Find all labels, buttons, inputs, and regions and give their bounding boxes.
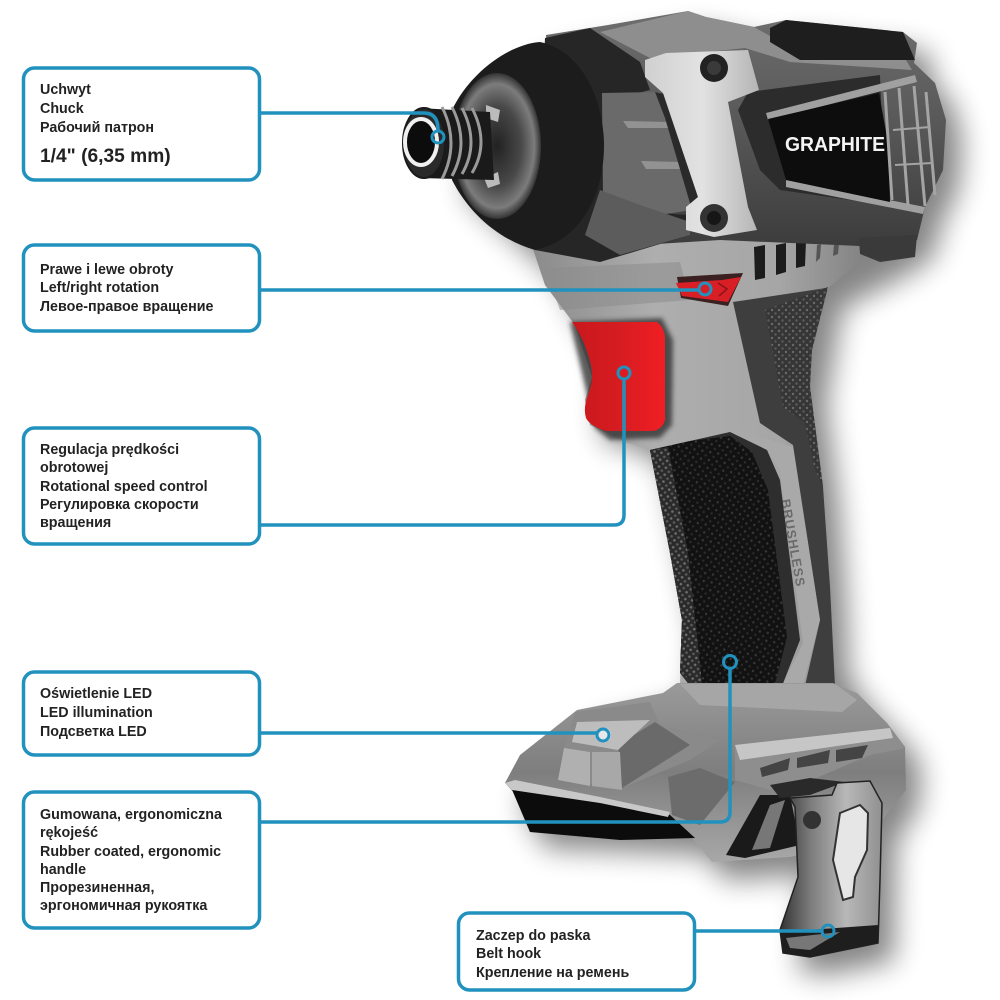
rear grille — [885, 86, 935, 206]
callout: speed control: Regulacja prędkości — [40, 442, 179, 458]
callout: speed control: вращения — [40, 515, 111, 531]
callout: belt hook — [458, 913, 694, 990]
rear grip dotted rubber — [765, 287, 828, 487]
callout: belt hook: Zaczep do paska — [476, 928, 591, 944]
grip left lighter strip — [650, 447, 702, 684]
callout: LED: LED illumination — [40, 705, 153, 721]
callout: speed control: Rotational speed control — [40, 479, 208, 495]
handle body — [530, 240, 885, 685]
light stripes around label — [766, 75, 925, 214]
callout: LED: Подсветка LED — [40, 724, 147, 740]
base top block — [560, 702, 720, 788]
top gray cover — [600, 11, 912, 70]
motor housing — [546, 11, 946, 256]
leader: rotation switch — [259, 283, 711, 295]
spindle highlights — [484, 105, 500, 188]
collar slots — [623, 121, 683, 169]
logo: GRAPHITE — [785, 134, 885, 156]
LED lens — [597, 728, 611, 742]
nose inner ring — [453, 73, 541, 219]
callout: rotation: Prawe i lewe obroty — [40, 262, 174, 278]
battery base — [505, 683, 906, 862]
leader: grip — [259, 656, 736, 822]
callout: rotation: Left/right rotation — [40, 280, 159, 296]
trigger recess — [570, 318, 673, 440]
callout: grip: handle — [40, 862, 86, 878]
callout: grip — [24, 792, 260, 928]
grip inner dark lining — [650, 432, 800, 686]
callout: rotation — [24, 245, 260, 331]
callout: chuck: 1/4" (6,35 mm) — [40, 146, 171, 167]
callout: grip: Прорезиненная, — [40, 880, 154, 896]
leader: belt hook — [695, 925, 834, 937]
black logo panel — [768, 93, 890, 202]
black nose rear — [535, 28, 690, 262]
red trigger — [572, 322, 665, 431]
callout: speed control: obrotowej — [40, 460, 108, 476]
drill tool illustration — [403, 11, 946, 957]
handle highlight band — [545, 262, 690, 310]
callout: belt hook: Belt hook — [476, 946, 541, 962]
callout: speed control: Регулировка скорости — [40, 497, 199, 513]
callout: chuck: Uchwyt — [40, 82, 91, 98]
callout: LED — [24, 672, 260, 755]
callout: speed control — [24, 428, 260, 544]
silver band — [645, 50, 759, 237]
black dotted grip — [650, 436, 787, 684]
silver side strip with lettering — [730, 428, 820, 686]
battery slot — [510, 785, 695, 840]
callout: grip: эргономичная рукоятка — [40, 898, 208, 914]
callout: chuck — [24, 68, 260, 180]
black nose cone — [452, 42, 604, 250]
direction switch — [676, 273, 743, 306]
belt hook — [780, 781, 882, 957]
callout: grip: Rubber coated, ergonomic — [40, 844, 221, 860]
callout: grip: Gumowana, ergonomiczna — [40, 807, 223, 823]
callout: LED: Oświetlenie LED — [40, 686, 152, 702]
brushless lettering: BRUSHLESS — [778, 498, 808, 588]
callout: chuck: Рабочий патрон — [40, 120, 154, 136]
clip mount recess — [726, 795, 800, 858]
gray collar section — [602, 92, 692, 218]
drop shadow of the tool — [468, 30, 962, 975]
screw bottom — [700, 204, 728, 232]
rear grip dark band — [733, 288, 835, 686]
top dark rear — [770, 20, 915, 60]
screw top — [700, 54, 728, 82]
callout: belt hook: Крепление на ремень — [476, 965, 629, 981]
base vents — [760, 745, 868, 777]
rear side dark panel — [738, 75, 885, 205]
leader: chuck — [259, 113, 444, 143]
callout: rotation: Левое-правое вращение — [40, 299, 214, 315]
bottom lip — [859, 235, 917, 262]
handle vents — [754, 241, 839, 280]
callout: grip: rękojeść — [40, 825, 98, 841]
callout: chuck: Chuck — [40, 101, 84, 117]
leader: LED — [259, 729, 609, 741]
leader: speed control — [259, 367, 630, 525]
chuck — [403, 107, 494, 180]
